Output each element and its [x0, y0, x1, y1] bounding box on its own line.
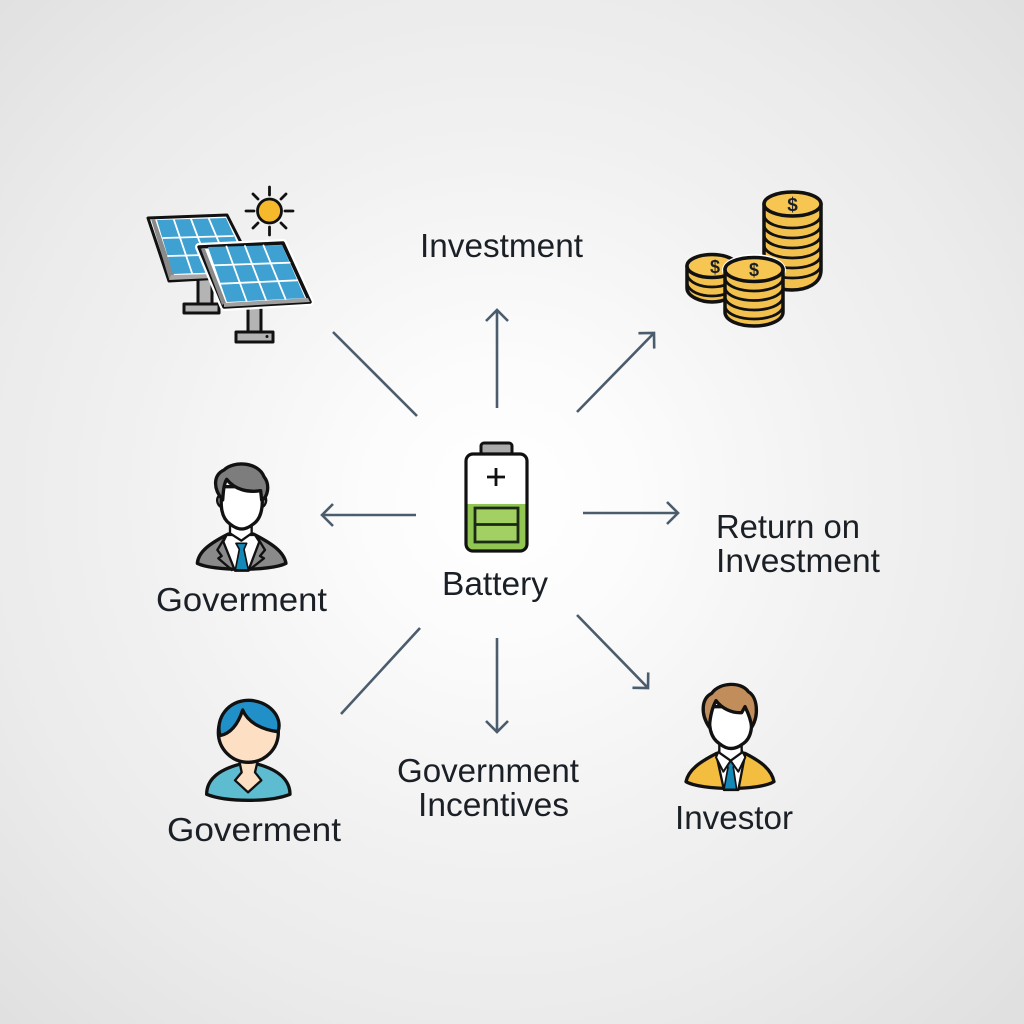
label: Goverment lower: Goverment: [167, 811, 341, 848]
icon: coin stacks: [687, 192, 821, 326]
icon: investor man: [686, 684, 774, 790]
label: Battery: Battery: [442, 565, 549, 602]
icon: front solar panel: [199, 243, 310, 342]
icon: government man: [197, 464, 286, 571]
icon: battery: [466, 443, 527, 551]
hair: [216, 464, 268, 500]
arrow: from solar panels: [333, 332, 417, 416]
face: [709, 707, 752, 748]
arrow: down to government incentives: [496, 638, 498, 732]
jacket: [197, 534, 286, 569]
label: Government Incentives: Incentives: [418, 786, 569, 823]
icon: sun: [246, 187, 293, 235]
arrow: to government: [322, 514, 416, 516]
neck: [719, 742, 742, 761]
ears: [217, 495, 266, 507]
label: Government Incentives: Government: [397, 752, 579, 789]
icon: front coin stack: $: [749, 260, 759, 280]
battery cap: [481, 443, 512, 455]
arrow: to return on investment: [583, 512, 678, 514]
label: Goverment upper: Goverment: [156, 581, 327, 618]
face: [221, 487, 262, 529]
tie: [235, 543, 248, 570]
arrow: to coins: [577, 333, 654, 412]
torso: [207, 764, 290, 800]
icon: back solar panel: [148, 215, 258, 313]
collar: [716, 750, 745, 772]
label: Return on Investment: [716, 508, 880, 579]
battery body: [466, 454, 527, 551]
tie: [724, 761, 737, 789]
shirt: [716, 753, 745, 790]
arrow: to investor: [577, 615, 648, 688]
label: Return on Investment: Investment: [716, 542, 880, 579]
arrow: up to investment: [496, 310, 498, 408]
icon: tall coin stack: $: [787, 195, 798, 216]
neck: [230, 522, 252, 541]
battery plus sign: [487, 468, 505, 486]
heading: Investment: Investment: [420, 227, 583, 264]
lapels: [217, 537, 265, 571]
hair: [703, 684, 756, 727]
icon: small coin stack: $: [710, 257, 720, 277]
label: Return on Investment: Return on: [716, 508, 860, 545]
shirt: [223, 535, 259, 571]
face: [218, 702, 278, 762]
jacket: [686, 753, 774, 788]
icon: government woman: [207, 700, 290, 800]
icon: solar panels with sun: [148, 187, 310, 342]
label: Investor: Investor: [675, 799, 793, 836]
battery cells: [475, 508, 518, 542]
arrow: from lower-left government: [341, 628, 420, 714]
label: Government Incentives: [397, 752, 579, 823]
neck: [235, 761, 261, 792]
hair: [219, 700, 279, 736]
